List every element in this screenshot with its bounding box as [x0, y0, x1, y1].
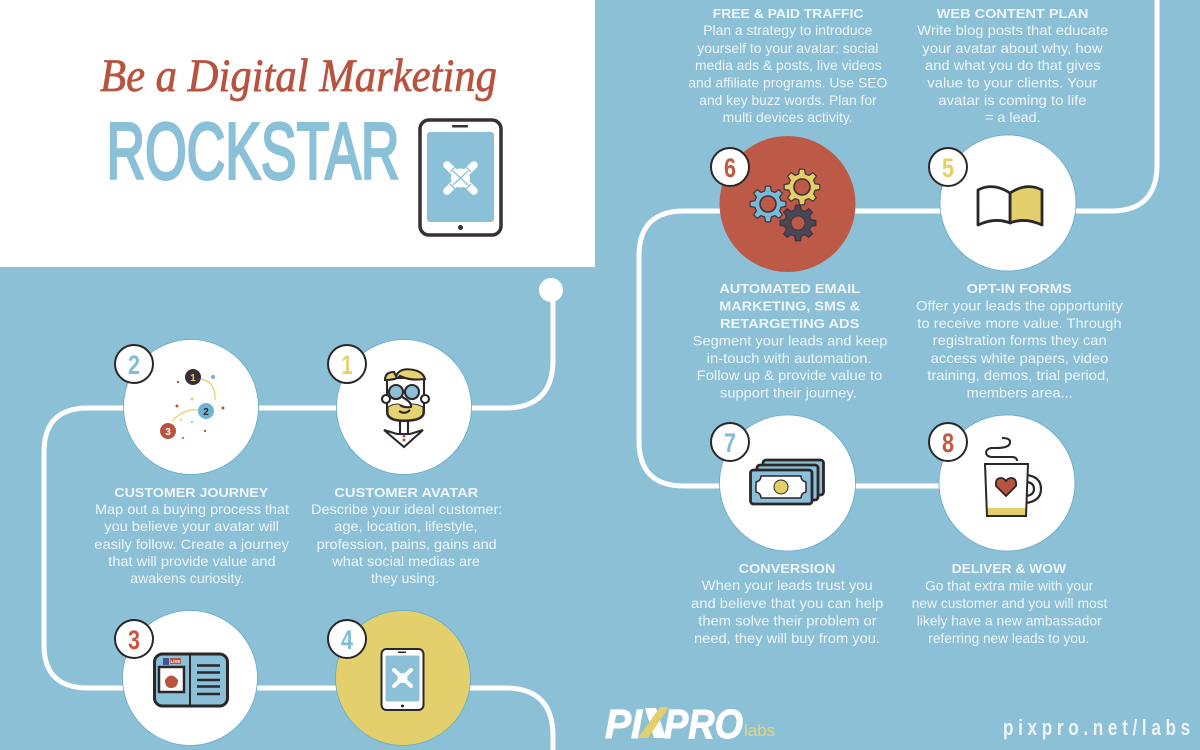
connector path: left journey [44, 290, 553, 750]
badge: number 4 [328, 620, 366, 658]
icon: avatar [382, 369, 429, 447]
text block: deliver and wow: DELIVER & WOW [952, 561, 1067, 576]
text block: web content plan: Write blog posts that educate [917, 23, 1109, 38]
icon: journey map: 3 [165, 427, 171, 438]
text block: customer journey: easily follow. Create a journey [94, 537, 289, 552]
icon: social book: LIVE [170, 659, 181, 664]
text block: automated email: AUTOMATED EMAIL [719, 281, 860, 296]
badge: number 5 [929, 148, 967, 186]
start dot [539, 278, 563, 302]
text block: free and paid traffic: Plan a strategy to introduce [703, 23, 873, 38]
icon: gears [750, 169, 820, 241]
title: rockstar: ROCKSTAR [106, 106, 400, 196]
icon: small tablet [382, 649, 424, 710]
text block: conversion: When your leads trust you [702, 578, 873, 593]
badge: number 3: 3 [128, 625, 140, 655]
icon: journey map [160, 369, 224, 439]
icon: money stack [750, 460, 824, 504]
text block: opt-in forms: to receive more value. Through [917, 316, 1122, 331]
text block: customer avatar [311, 485, 502, 586]
icon: journey map: 2 [203, 407, 209, 418]
text block: automated email: Follow up & provide value to [697, 368, 883, 383]
text block: customer avatar: Describe your ideal customer: [311, 502, 502, 517]
text block: automated email: support their journey. [720, 386, 857, 400]
badge: number 8 [929, 423, 967, 461]
badge: number 1: 1 [342, 350, 352, 380]
badge: number 7 [711, 423, 749, 461]
text block: opt-in forms [916, 281, 1123, 400]
badge: number 8: 8 [942, 428, 954, 458]
text block: automated email: in-touch with automation. [707, 351, 872, 366]
text block: web content plan: and what you do that gives [925, 58, 1101, 73]
website url: pixpro.net/labs [1003, 716, 1190, 741]
text block: conversion: need, they will buy from you. [694, 631, 880, 646]
text block: free and paid traffic: multi devices activity. [723, 110, 853, 125]
text block: opt-in forms: members area... [967, 386, 1073, 400]
step 6: red circle [720, 136, 856, 272]
text block: customer avatar: profession, pains, gains and [317, 537, 497, 552]
text block: web content plan: WEB CONTENT PLAN [937, 6, 1088, 21]
text block: conversion: CONVERSION [739, 561, 835, 576]
badge: number 7: 7 [724, 428, 736, 458]
text block: customer avatar: age, location, lifestyle, [334, 519, 478, 534]
icon: open book [978, 187, 1042, 225]
text block: opt-in forms: OPT-IN FORMS [967, 281, 1072, 296]
text block: free and paid traffic: FREE & PAID TRAFFIC [713, 6, 864, 21]
step 7: white circle [720, 415, 856, 551]
text block: opt-in forms: access white papers, video [931, 351, 1109, 366]
text block: customer avatar: they using. [371, 571, 439, 586]
badge: number 5: 5 [942, 153, 954, 183]
text block: web content plan: your avatar about why, how [922, 41, 1103, 56]
connector path: right journey [639, 0, 1157, 486]
text block: automated email: RETARGETING ADS [720, 316, 860, 331]
panel: title header [0, 0, 595, 267]
text block: automated email: MARKETING, SMS & [719, 298, 861, 314]
text block: customer journey: awakens curiosity. [130, 571, 244, 586]
text block: web content plan: value to your clients. Your [927, 76, 1098, 90]
text block: web content plan: = a lead. [985, 110, 1041, 125]
title: script line: Be a Digital Marketing [100, 50, 497, 102]
text block: conversion [691, 561, 884, 646]
step 1: customer avatar circle [336, 340, 472, 474]
step 4: yellow circle [336, 610, 470, 746]
text block: web content plan [917, 6, 1109, 125]
text block: deliver and wow: new customer and you will most [912, 596, 1108, 611]
text block: customer avatar: CUSTOMER AVATAR [334, 485, 479, 500]
icon: journey map: 1 [190, 373, 196, 384]
badge: number 4: 4 [341, 625, 353, 655]
step 3: social content circle [122, 610, 258, 746]
text block: free and paid traffic: yourself to your avatar: social [697, 41, 878, 56]
text block: deliver and wow: Go that extra mile with your [925, 578, 1094, 594]
text block: web content plan: avatar is coming to life [938, 93, 1087, 108]
step 2: customer journey circle [124, 340, 258, 474]
text block: free and paid traffic: and key buzz words. Plan for [699, 93, 877, 108]
badge: number 6: 6 [724, 153, 736, 183]
text block: free and paid traffic: and affiliate programs. Use SEO [688, 76, 888, 90]
step 8: white circle [939, 415, 1075, 551]
text block: automated email [693, 281, 888, 400]
text block: deliver and wow: referring new leads to you. [928, 631, 1089, 646]
text block: deliver and wow: likely have a new ambassador [917, 614, 1102, 628]
text block: customer journey: Map out a buying process that [95, 502, 289, 517]
badge: number 2 [115, 345, 153, 383]
text block: free and paid traffic: media ads & posts, live videos [695, 58, 882, 73]
logo: pixpro labs: labs [744, 721, 775, 740]
badge: number 1 [328, 345, 366, 383]
text block: customer journey: that will provide value and [108, 554, 276, 569]
text block: customer journey: CUSTOMER JOURNEY [114, 485, 269, 500]
text block: customer journey: you believe your avatar will [104, 519, 279, 534]
logo: pixpro labs [605, 701, 775, 747]
badge: number 3 [115, 620, 153, 658]
text block: deliver and wow [912, 561, 1108, 646]
text block: customer avatar: what social medias are [331, 554, 480, 569]
text block: customer journey [94, 485, 289, 586]
text block: conversion: and believe that you can help [691, 596, 884, 611]
text block: opt-in forms: Offer your leads the opportunity [916, 298, 1123, 314]
badge: number 6 [711, 148, 749, 186]
text block: opt-in forms: training, demos, trial period, [927, 368, 1109, 383]
icon: coffee mug [985, 438, 1041, 516]
logo: pixpro labs: PRO [664, 701, 743, 747]
text block: conversion: them solve their problem or [698, 614, 877, 628]
text block: opt-in forms: registration forms they can [933, 333, 1107, 348]
text block: automated email: Segment your leads and keep [693, 334, 888, 348]
text block: free and paid traffic [688, 6, 888, 125]
logo: pixpro labs: PI [605, 701, 644, 747]
step 5: white circle [940, 135, 1076, 271]
badge: number 2: 2 [128, 350, 140, 380]
icon: title tablet [420, 120, 501, 235]
